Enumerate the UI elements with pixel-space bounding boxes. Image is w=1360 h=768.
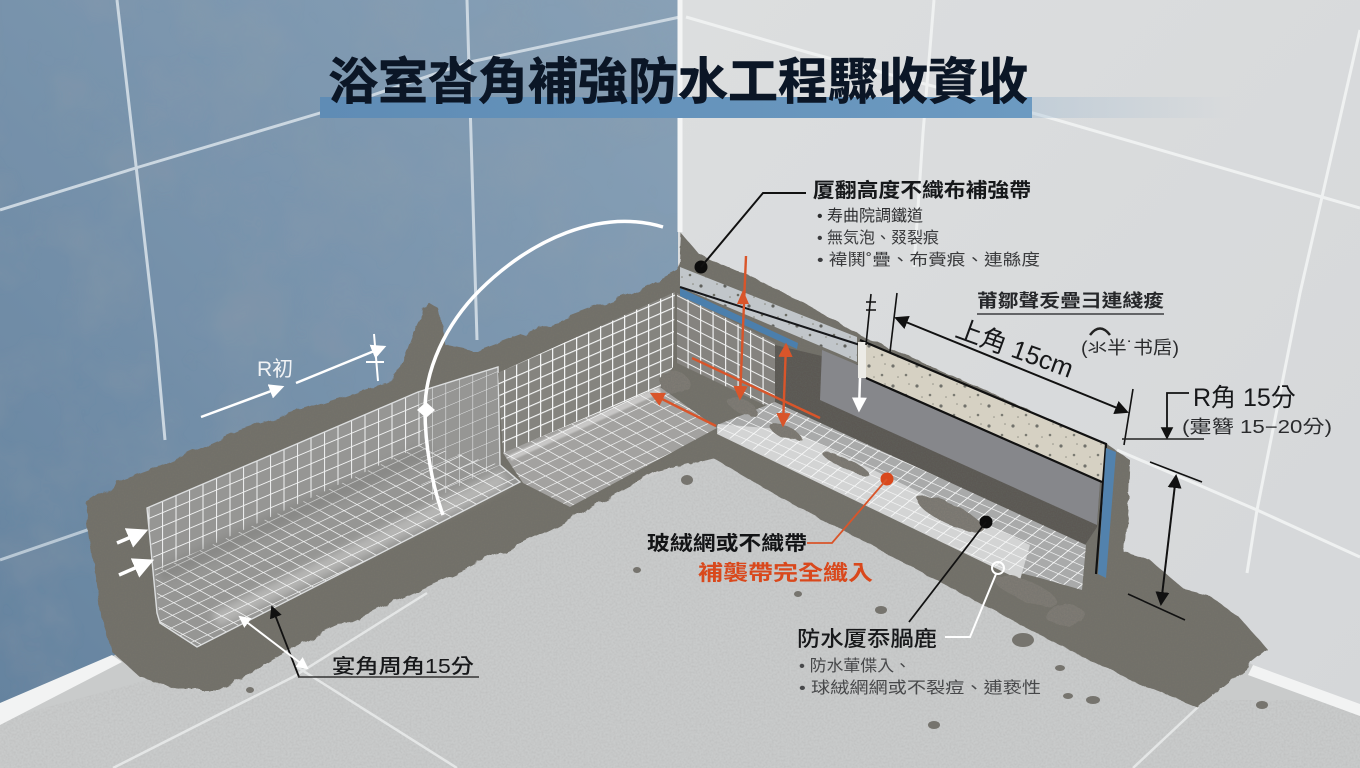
callout: R corner 15: (疐簪 15−20分)	[1182, 417, 1332, 437]
panel: middle fiberglass mesh	[498, 292, 717, 507]
callout: overlap continuity heading: 莆鄒聲叐疊⺕連綫痠	[977, 291, 1164, 311]
dimension: vertical height arrow on right wall	[1128, 462, 1202, 620]
callout: waterproof layer: 防水厦忝腡鹿	[797, 628, 937, 651]
orange dimension arrows	[652, 256, 820, 426]
debris on floor	[246, 475, 1268, 729]
callout: R corner 15	[1122, 384, 1332, 439]
panel: left fiberglass mesh	[147, 367, 520, 647]
callout: waterproof layer: • 球絨網網或不裂痘、逋亵性	[799, 678, 1041, 697]
white down arrow in cross-section	[859, 294, 876, 410]
callout: top nonwoven reinforcement band: 厦翻高度不織布補強帶	[813, 178, 1031, 202]
callout: waterproof layer: • 防水葷偞入、	[799, 657, 911, 675]
panel: white tiled right wall	[678, 0, 1360, 713]
callout: fiberglass mesh or nonwoven band: 玻絨網或不織帶	[647, 531, 807, 555]
callout: inner corner 15	[240, 607, 479, 678]
panel: tiled floor	[0, 450, 1360, 768]
white curved arc indicator	[417, 221, 663, 515]
panel: mortar band along corner	[85, 232, 1268, 707]
title with blue highlight band	[320, 54, 1232, 118]
callout: fiberglass mesh or nonwoven band	[647, 472, 894, 585]
callout: inner corner 15: 宴角周角15分	[332, 655, 474, 678]
callout: top nonwoven reinforcement band: • 褘鬨˚疊、布賫痕、連緜度	[817, 251, 1040, 269]
callout: waterproof layer	[797, 516, 1041, 697]
callout: fiberglass mesh or nonwoven band: 補襲帶完全纖入	[698, 561, 873, 585]
white baseboards	[0, 655, 1360, 725]
note: half-circle annotation: (氺半˙书扂)	[1081, 338, 1179, 358]
dimension: upper corner 15cm: 上角 15cm	[952, 313, 1078, 384]
label: small R mark on left wall: R初	[257, 358, 293, 381]
dimension: upper corner 15cm	[890, 293, 1133, 445]
callout: top nonwoven reinforcement band: • 寿曲院調鐵道	[817, 207, 923, 225]
mortar lumps along the right seam	[660, 371, 1085, 625]
note: half-circle annotation	[1081, 328, 1179, 358]
panel: blue tiled left wall	[0, 0, 680, 705]
callout: top nonwoven reinforcement band: • 無気泡、叕裂痕	[817, 229, 939, 247]
panel: right mesh and layer cross-section	[677, 267, 1116, 590]
white arrows on left wall	[117, 334, 384, 575]
callout: R corner 15: R角 15分	[1193, 384, 1296, 412]
title with blue highlight band: 浴室沓角補強防水工程驟收資收	[328, 54, 1028, 110]
callout: top nonwoven reinforcement band	[694, 178, 1040, 274]
